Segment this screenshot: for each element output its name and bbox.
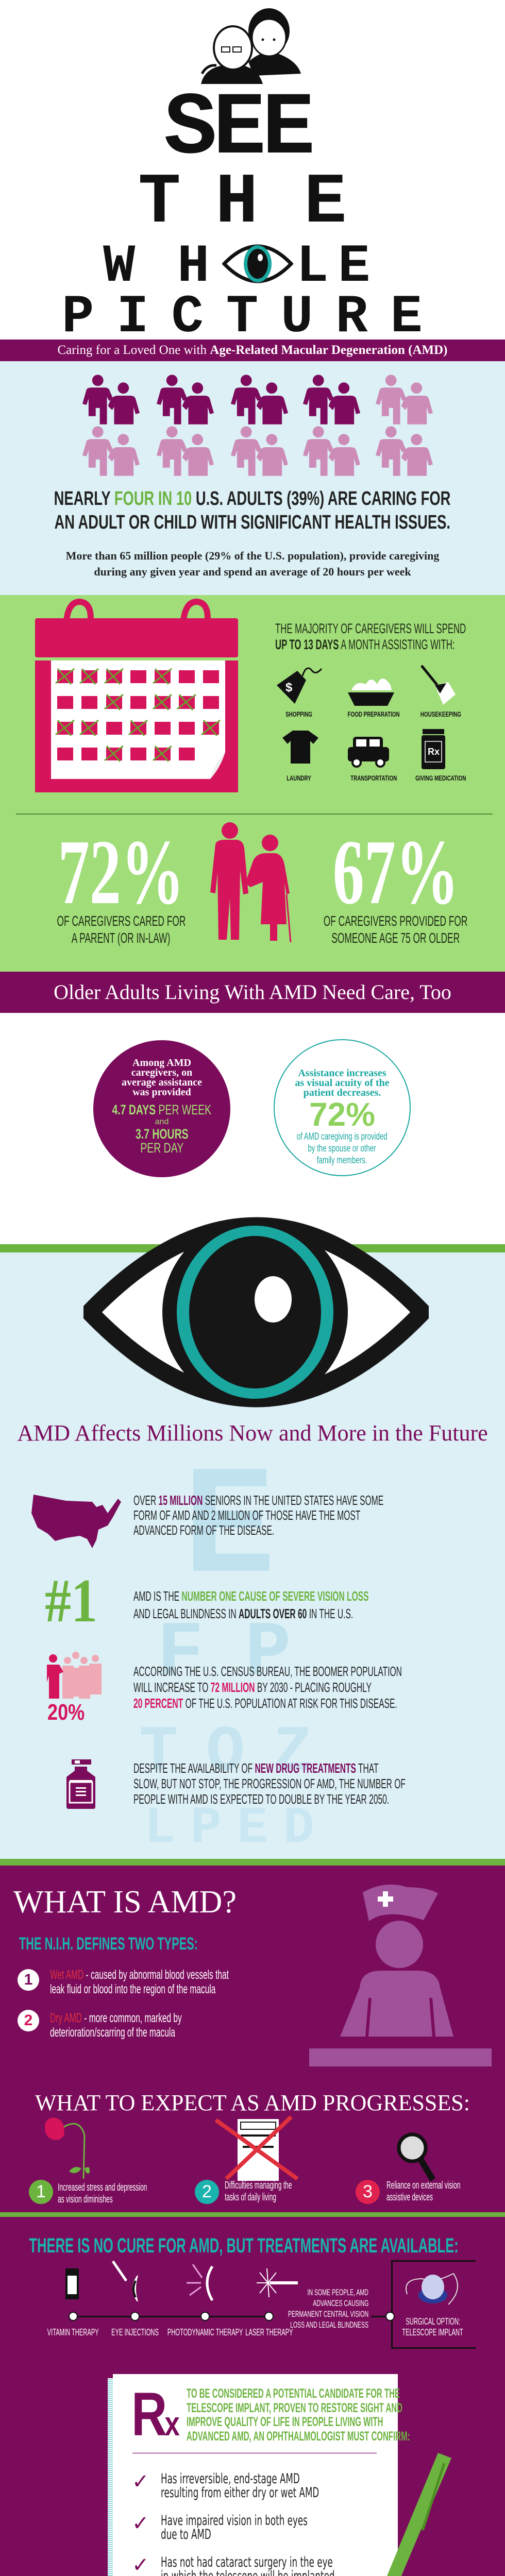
stat: 15 million: OVER 15 MILLION SENIORS IN THE UNITED STATES HAVE SOME	[133, 1493, 383, 1508]
list: progression effects: Difficulties managing the	[225, 2180, 292, 2191]
callout: purple circle days: and	[155, 1117, 169, 1126]
icons: caregiving tasks	[277, 665, 466, 782]
title: SEE THE WHOLE PICTURE: E	[338, 236, 370, 297]
stat: 20 percent	[47, 1652, 402, 1725]
heading: no cure: THERE IS NO CURE FOR AMD, BUT TREATMENTS ARE AVAILABLE:	[29, 2234, 459, 2257]
stat: number one cause	[45, 1566, 369, 1635]
stat: number one cause: AMD IS THE NUMBER ONE CAUSE OF SEVERE VISION LOSS	[133, 1588, 369, 1604]
list: wet and dry AMD	[18, 1968, 229, 2040]
chart: treatment timeline: PERMANENT CENTRAL VISION	[288, 2309, 368, 2319]
title: SEE THE WHOLE PICTURE: P	[62, 287, 94, 348]
stat: 72% parent: A PARENT (OR IN-LAW)	[72, 930, 171, 946]
list: progression effects: 2	[202, 2182, 212, 2201]
text: 13 days: UP TO 13 DAYS A MONTH ASSISTING WITH:	[275, 637, 455, 652]
text: 65 million: More than 65 million people (29% of the U.S. population), provide caregiving	[66, 549, 439, 562]
list: progression effects	[29, 2115, 460, 2205]
icon: calendar	[35, 599, 238, 792]
card: Rx candidate checklist: IMPROVE QUALITY OF LIFE IN PEOPLE LIVING WITH	[187, 2415, 383, 2429]
card: Rx candidate checklist: Has irreversible, end-stage AMD	[161, 2471, 300, 2487]
card: Rx candidate checklist: resulting from either dry or wet AMD	[161, 2485, 319, 2501]
card: Rx candidate checklist: ✓	[132, 2512, 149, 2535]
title: AMD affects: AMD Affects Millions Now and More in the Future	[17, 1420, 488, 1446]
panel: AMD affects millions: LPED	[144, 1800, 330, 1858]
stat: drug treatments: SLOW, BUT NOT STOP, THE PROGRESSION OF AMD, THE NUMBER OF	[133, 1776, 406, 1791]
callout: purple circle days: PER DAY	[140, 1140, 183, 1156]
card: Rx candidate checklist: Rx	[131, 2380, 177, 2449]
list: progression effects: 1	[36, 2182, 46, 2201]
list: wet and dry AMD: 1	[24, 1971, 32, 1988]
title: SEE THE WHOLE PICTURE: E	[304, 163, 347, 243]
stat: 67% age 75: SOMEONE AGE 75 OR OLDER	[331, 930, 460, 946]
icons: caregiving tasks: GIVING MEDICATION	[415, 774, 466, 782]
callout: purple circle days: 4.7 DAYS PER WEEK	[112, 1102, 211, 1117]
list: progression effects: Reliance on external vision	[386, 2180, 460, 2191]
title: SEE THE WHOLE PICTURE: U	[281, 287, 313, 348]
card: Rx candidate checklist: ADVANCED AMD, AN OPHTHALMOLOGIST MUST CONFIRM:	[187, 2429, 410, 2443]
callout: purple circle days: was provided	[132, 1087, 191, 1098]
list: progression effects: tasks of daily living	[225, 2192, 276, 2203]
stat: 20 percent: ACCORDING THE U.S. CENSUS BUREAU, THE BOOMER POPULATION	[133, 1664, 402, 1679]
card: Rx candidate checklist: TO BE CONSIDERED A POTENTIAL CANDIDATE FOR THE	[187, 2386, 400, 2401]
callout: teal circle 72%	[274, 1039, 411, 1176]
icons: caregiving tasks: $	[285, 681, 293, 694]
icon: caregiver couple	[201, 8, 301, 84]
panel: caregiver stats	[0, 361, 505, 595]
headline: four in ten: AN ADULT OR CHILD WITH SIGNIFICANT HEALTH ISSUES.	[55, 512, 450, 533]
callout: purple circle days: Among AMD	[132, 1057, 191, 1069]
stat: 15 million: FORM OF AMD AND 2 MILLION OF THOSE HAVE THE MOST	[133, 1507, 360, 1523]
text: 13 days	[275, 621, 466, 652]
stat: drug treatments: PEOPLE WITH AMD IS EXPECTED TO DOUBLE BY THE YEAR 2050.	[133, 1791, 389, 1807]
headline: four in ten	[54, 488, 451, 533]
list: wet and dry AMD: Wet AMD - caused by abnormal blood vessels that	[50, 1968, 229, 1982]
card: Rx candidate checklist: due to AMD	[161, 2527, 211, 2543]
title: what is AMD: WHAT IS AMD?	[13, 1885, 237, 1920]
chart: treatment timeline: SURGICAL OPTION:	[406, 2316, 460, 2327]
title: SEE THE WHOLE PICTURE: L	[296, 236, 328, 297]
list: progression effects: assistive devices	[386, 2192, 433, 2203]
chart: treatment timeline: VITAMIN THERAPY	[47, 2327, 99, 2337]
title: SEE THE WHOLE PICTURE: R	[335, 287, 368, 348]
icons: caregiving tasks: HOUSEKEEPING	[420, 710, 461, 718]
banner: caring subtitle: Caring for a Loved One with Age-Related Macular Degeneration (AMD)	[58, 343, 447, 357]
callout: purple circle days: average assistance	[122, 1077, 202, 1088]
stat: 67% age 75: 67%	[332, 821, 459, 923]
text: 13 days: THE MAJORITY OF CAREGIVERS WILL SPEND	[275, 621, 466, 636]
chart: treatment timeline	[47, 2260, 476, 2349]
chart: treatment timeline: LOSS AND LEGAL BLINDNESS	[290, 2320, 368, 2330]
panel: AMD affects millions: TOZ	[139, 1716, 340, 1789]
list: progression effects: 3	[363, 2182, 373, 2201]
stat: 15 million	[31, 1493, 383, 1548]
title: SEE THE WHOLE PICTURE: H	[177, 236, 209, 297]
callout: teal circle 72%: 72%	[309, 1096, 375, 1133]
callout: purple circle days: 3.7 HOURS	[136, 1126, 188, 1142]
card: Rx candidate checklist: TELESCOPE IMPLANT, PROVEN TO RESTORE SIGHT AND	[187, 2401, 402, 2415]
chart: treatment timeline: ADVANCES CAUSING	[313, 2298, 368, 2308]
callout: teal circle 72%: of AMD caregiving is provided	[297, 1131, 388, 1142]
callout: teal circle 72%: Assistance increases	[298, 1067, 386, 1079]
icon: big eye	[83, 1217, 429, 1408]
list: wet and dry AMD: deterioration/scarring of the macula	[50, 2025, 175, 2040]
title: SEE THE WHOLE PICTURE: T	[226, 287, 258, 348]
headline: four in ten: NEARLY FOUR IN 10 U.S. ADULTS (39%) ARE CARING FOR	[54, 488, 451, 510]
chart: treatment timeline: LASER THERAPY	[245, 2327, 293, 2337]
card: Rx candidate checklist: ✓	[132, 2470, 149, 2494]
banner: older adults	[0, 972, 505, 1013]
heading: what to expect: WHAT TO EXPECT AS AMD PROGRESSES:	[35, 2090, 470, 2115]
title: SEE THE WHOLE PICTURE	[62, 79, 423, 348]
list: wet and dry AMD: Dry AMD - more common, marked by	[50, 2011, 182, 2025]
title: SEE THE WHOLE PICTURE: H	[215, 163, 258, 243]
text: 65 million	[66, 549, 439, 578]
title: SEE THE WHOLE PICTURE: E	[391, 287, 423, 348]
stat: drug treatments: DESPITE THE AVAILABILITY OF NEW DRUG TREATMENTS THAT	[133, 1760, 379, 1776]
chart: treatment timeline: PHOTODYNAMIC THERAPY	[167, 2327, 243, 2337]
title: SEE THE WHOLE PICTURE: SEE	[164, 79, 311, 179]
stat: 72% parent: 72%	[58, 821, 184, 923]
callout: teal circle 72%: family members.	[317, 1155, 367, 1166]
stat: number one cause: #1	[45, 1566, 97, 1635]
people icons grid	[82, 375, 433, 476]
panel: what is AMD	[0, 1866, 505, 2576]
icons: caregiving tasks: FOOD PREPARATION	[348, 710, 399, 718]
callout: teal circle 72%: by the spouse or other	[308, 1143, 376, 1154]
icons: caregiving tasks: TRANSPORTATION	[350, 774, 397, 782]
title: SEE THE WHOLE PICTURE: W	[103, 236, 135, 297]
icons: caregiving tasks: LAUNDRY	[287, 774, 311, 782]
title: SEE THE WHOLE PICTURE: I	[116, 287, 149, 348]
title: SEE THE WHOLE PICTURE: C	[171, 287, 204, 348]
stat: 20 percent: WILL INCREASE TO 72 MILLION BY 2030 - PLACING ROUGHLY	[133, 1680, 372, 1695]
list: wet and dry AMD: leak fluid or blood into the region of the macula	[50, 1982, 215, 1996]
list: progression effects: as vision diminishes	[58, 2194, 113, 2205]
stat: 67% age 75: OF CAREGIVERS PROVIDED FOR	[324, 913, 467, 929]
callout: teal circle 72%: patient decreases.	[304, 1087, 381, 1098]
title: SEE THE WHOLE PICTURE: T	[138, 163, 181, 243]
card: Rx candidate checklist: Have impaired vision in both eyes	[161, 2513, 308, 2529]
stat: 20 percent: 20 PERCENT OF THE U.S. POPULATION AT RISK FOR THIS DISEASE.	[133, 1696, 397, 1711]
callout: purple circle days: caregivers, on	[131, 1067, 192, 1078]
heading: NIH two types: THE N.I.H. DEFINES TWO TYPES:	[19, 1934, 198, 1954]
callout: purple circle days	[93, 1040, 230, 1177]
panel: green caregiving	[0, 595, 505, 972]
stat: 72% parent: OF CAREGIVERS CARED FOR	[57, 913, 186, 929]
stat: 20 percent: 20%	[47, 1700, 85, 1725]
icon: green pen	[387, 2453, 451, 2576]
icons: caregiving tasks: SHOPPING	[285, 710, 312, 718]
chart: treatment timeline: IN SOME PEOPLE, AMD	[308, 2287, 368, 2297]
list: progression effects: Increased stress and depression	[58, 2182, 147, 2193]
card: Rx candidate checklist	[108, 2374, 445, 2576]
text: 65 million: during any given year and spend an average of 20 hours per week	[94, 565, 411, 578]
banner: older adults: Older Adults Living With AMD Need Care, Too	[54, 980, 451, 1004]
chart: treatment timeline: EYE INJECTIONS	[111, 2327, 159, 2337]
chart: treatment timeline: TELESCOPE IMPLANT	[402, 2327, 463, 2337]
icons: caregiving tasks: Rx	[428, 747, 440, 757]
banner: caring subtitle	[0, 340, 505, 361]
stat: drug treatments	[66, 1759, 406, 1809]
list: wet and dry AMD: 2	[24, 2012, 32, 2029]
stat: number one cause: AND LEGAL BLINDNESS IN ADULTS OVER 60 IN THE U.S.	[133, 1606, 353, 1621]
card: Rx candidate checklist: Has not had cataract surgery in the eye	[161, 2554, 333, 2570]
panel: AMD affects millions: FP	[157, 1610, 332, 1698]
icon: nurse	[309, 1885, 492, 2066]
panel: AMD affects millions	[0, 1244, 505, 1866]
faint eye chart letters: E	[183, 1443, 276, 1618]
stat: 15 million: ADVANCED FORM OF THE DISEASE.	[133, 1522, 274, 1538]
callout: teal circle 72%: as visual acuity of the	[295, 1077, 390, 1089]
icon: elderly couple	[210, 822, 292, 942]
